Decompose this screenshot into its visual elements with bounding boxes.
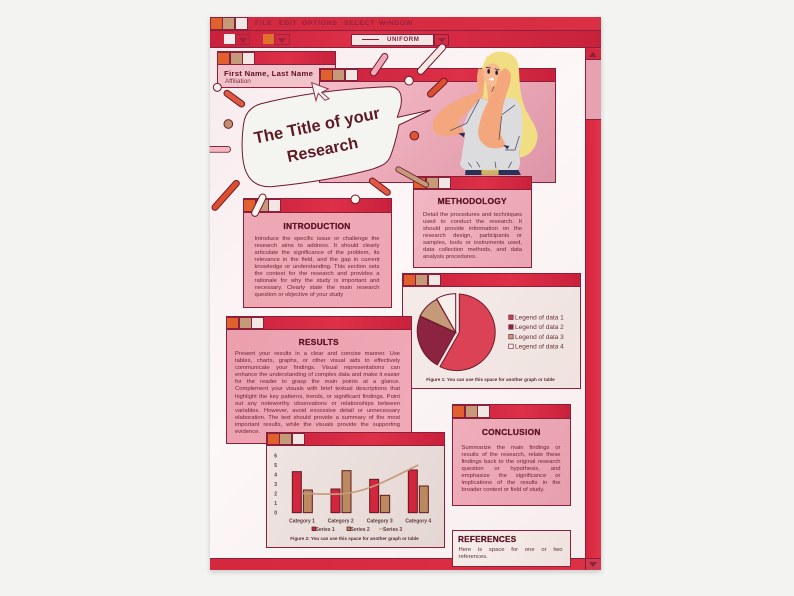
text: results: for the reader to grasp the main points at a glance. — [235, 379, 400, 385]
text: methodology — [423, 212, 522, 260]
bar chart: Series 1 — [316, 527, 335, 533]
speech bubble: title: Research — [286, 135, 360, 166]
bar chart: 3 — [274, 482, 277, 488]
text: methodology: should provide information on the — [423, 226, 522, 232]
panel: author: Affiliation — [225, 78, 251, 84]
bar chart: 2 — [274, 491, 277, 497]
bar chart: Category 1 — [289, 518, 315, 524]
text: methodology: Detail the procedures and techniques — [423, 212, 522, 218]
text: references — [458, 546, 562, 560]
panel: references — [452, 530, 570, 567]
text: introduction: the context for the research and provides a — [254, 271, 380, 277]
poster background — [210, 17, 601, 570]
text: methodology: samples, tools or instruments used, — [423, 240, 522, 246]
menu: options: OPTIONS — [302, 20, 338, 27]
text: introduction: necessary. Clearly state the main research — [254, 285, 380, 291]
text: conclusion — [462, 444, 560, 493]
text: results — [235, 351, 400, 435]
bar chart: Series 2 — [350, 527, 370, 533]
text: conclusion: question or hypothesis, and — [462, 466, 560, 472]
dropdown: uniform: UNIFORM — [387, 36, 419, 43]
menu bar — [210, 17, 601, 31]
toolbar — [210, 31, 601, 48]
heading: methodology: METHODOLOGY — [438, 196, 507, 206]
heading: introduction: INTRODUCTION — [283, 221, 351, 231]
text: results: tables, charts, graphs, or other visual aids to effectively — [235, 358, 400, 364]
text: results: out any noteworthy observations or relationships between — [235, 401, 400, 407]
text: conclusion: Summarize the main findings or — [462, 444, 560, 450]
panel: author — [216, 51, 336, 88]
text: conclusion: findings back to the original research — [462, 459, 560, 465]
menu: file: FILE — [255, 20, 273, 27]
panel: introduction — [242, 198, 392, 308]
text: conclusion: implications of the results in the — [462, 480, 560, 486]
window bar — [267, 432, 444, 446]
pie legend: Legend of data 2 — [515, 324, 564, 331]
bottom bar — [210, 558, 585, 570]
pie legend: Legend of data 4 — [515, 344, 564, 351]
menu: edit: EDIT — [279, 20, 297, 27]
text: introduction: rationale for why the study is important and — [254, 278, 380, 284]
decorative confetti and cursor — [210, 44, 448, 217]
bar chart: Category 4 — [405, 518, 431, 524]
window bar — [244, 199, 390, 212]
text: introduction: question or objective of your study — [254, 292, 343, 298]
text: methodology: research design, participants or — [423, 233, 522, 239]
window bar — [414, 176, 531, 190]
text: methodology: analysis procedures. — [423, 254, 477, 260]
text: references: Here is space for one or two — [458, 546, 562, 552]
text: methodology: data collection methods, and data — [423, 247, 522, 253]
text: conclusion: results of the research, relate these — [462, 452, 560, 458]
text: conclusion: emphasize the significance or — [462, 473, 560, 479]
heading: conclusion: CONCLUSION — [482, 427, 541, 437]
panel: results — [226, 316, 412, 444]
figure caption 1: Figure 1: You can use this space for another graph or table — [426, 377, 555, 382]
dropdown: uniform — [351, 34, 449, 46]
scrollbar — [585, 48, 601, 570]
panel: methodology — [412, 176, 532, 268]
pie legend: Legend of data 3 — [515, 334, 564, 341]
text: introduction: relevance in the field, and the gap in current — [254, 257, 380, 263]
text: results: enhance the understanding of complex data and make it easier — [235, 372, 400, 378]
window bar — [226, 316, 411, 330]
figure caption 2: Figure 2: You can use this space for another graph or table — [290, 536, 419, 540]
heading: references: REFERENCES — [458, 535, 516, 544]
text: introduction: articulate the significance of the problem, its — [254, 250, 380, 256]
text: introduction: Introduce the specific issue or challenge the — [254, 236, 380, 242]
speech bubble: title: The Title of your — [252, 104, 382, 148]
text: results: communicate your findings. Visual representations can — [235, 365, 400, 371]
bar chart: 4 — [274, 472, 277, 478]
bar chart: 6 — [274, 453, 277, 459]
heading: results: RESULTS — [299, 336, 339, 346]
bar chart: 5 — [274, 463, 277, 469]
text: results: variables. However, avoid excessive detail or unnecessary — [235, 408, 400, 414]
text: results: highlight the key patterns, trends, or significant findings. Point — [235, 394, 400, 400]
menu: select: SELECT — [344, 20, 375, 27]
text: results: Complement your visuals with brief textual descriptions that — [235, 386, 400, 392]
text: results: important results, while the visuals provide the supporting — [235, 422, 400, 428]
bar chart: Category 3 — [367, 518, 393, 524]
bar chart: Series 3 — [383, 527, 402, 533]
bar chart: 0 — [274, 510, 277, 516]
bar chart: Category 2 — [328, 518, 354, 524]
text: methodology: used to conduct the research. It — [423, 219, 522, 225]
panel: pie chart window — [402, 272, 581, 388]
bar chart: 1 — [274, 501, 277, 507]
panel: author: First Name, Last Name — [224, 68, 313, 78]
text: references: references. — [458, 554, 488, 560]
window bar — [452, 405, 570, 418]
text: results: Present your results in a clear and concise manner. Use — [235, 351, 400, 357]
panel: hero window — [319, 68, 556, 182]
window bar — [403, 274, 580, 286]
menu: window: WINDOW — [379, 20, 413, 27]
text: results: evidence. — [235, 429, 260, 435]
text: introduction — [254, 236, 380, 298]
text: conclusion: broader context or field of study. — [462, 487, 545, 493]
panel: bar chart window — [266, 432, 445, 548]
panel: conclusion — [452, 404, 571, 506]
text: results: elaboration. The text should provide a summary of the most — [235, 415, 400, 421]
text: introduction: research aims to address. It should clearly — [254, 243, 380, 249]
text: introduction: knowledge or understanding. This section sets — [254, 264, 380, 270]
pie legend: Legend of data 1 — [515, 314, 564, 322]
